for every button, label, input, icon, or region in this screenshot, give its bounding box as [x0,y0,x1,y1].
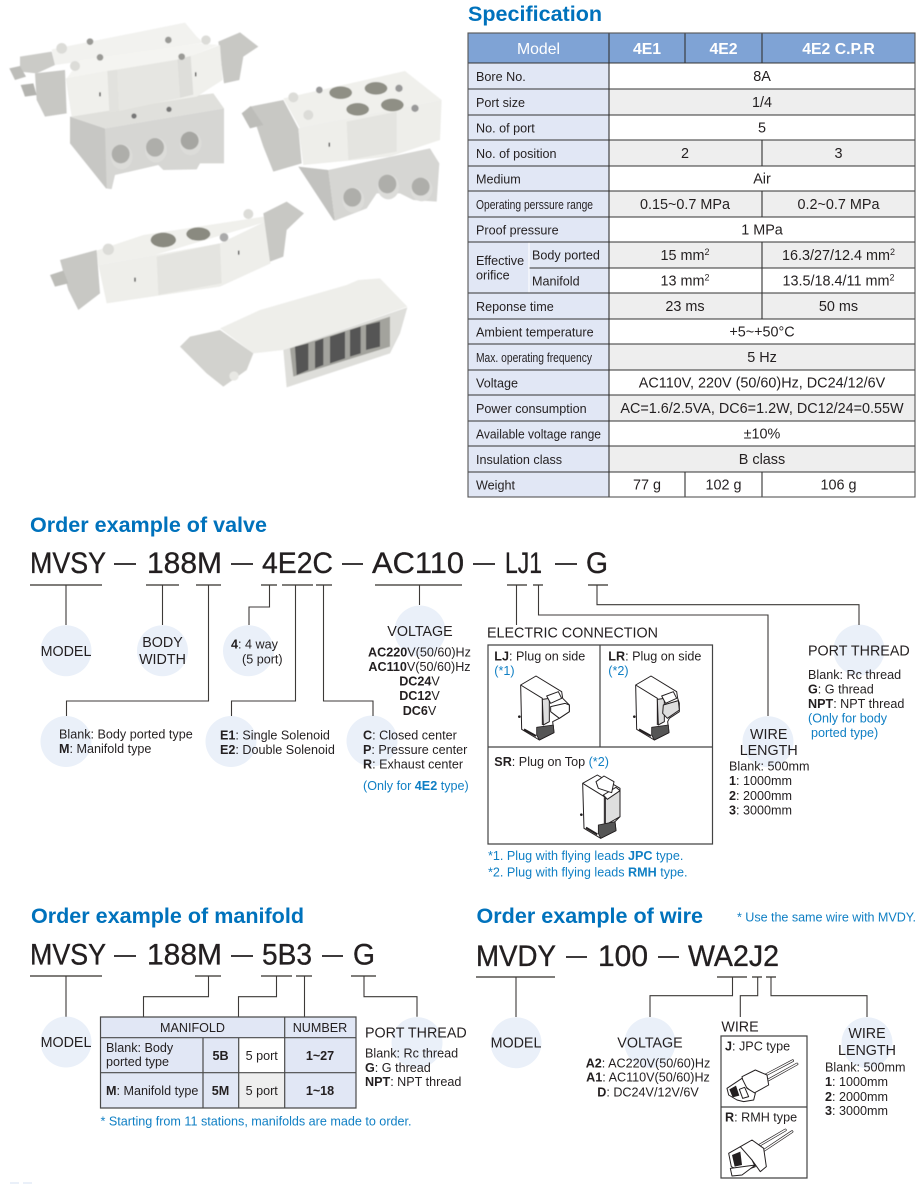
way and port note: 4: 4 way [231,638,278,652]
wire length options: 3: 3000mm [729,804,792,818]
wire order code [476,940,779,973]
wire length options: 1: 1000mm [825,1075,888,1089]
plug footnotes: *1. Plug with flying leads JPC type. [488,849,683,863]
voltage options: AC220V(50/60)Hz [368,646,471,660]
manifold order code [30,938,375,972]
table values: 2 [704,272,710,282]
way and port note: (5 port) [242,652,283,666]
callout circles [40,1016,442,1068]
wire length options: Blank: 500mm [729,760,810,774]
table values: 23 ms [665,299,705,315]
wire length options: 2: 2000mm [729,789,792,803]
valve with manifold, top left [9,23,258,189]
port thread options: PORT THREAD [808,644,910,660]
wire length options: 3: 3000mm [825,1104,888,1118]
table row labels: Proof pressure [476,224,559,238]
port thread options: NPT: NPT thread [365,1075,461,1089]
center options: (Only for 4E2 type) [363,779,469,793]
wire order code: WA2J2 [688,940,779,973]
table row labels: Available voltage range [476,428,601,442]
table row labels: Weight [476,478,515,492]
icon: LR side plug [633,676,679,740]
heading: order example of manifold: Order example of manifold [31,904,304,928]
mounting type options: Blank: Body ported type [59,728,193,742]
wire order code: 100 [598,940,648,973]
valve order code [30,547,608,580]
voltage options [368,624,471,718]
center options [363,729,469,793]
table values: 5 Hz [747,350,777,366]
manifold order code: G [353,938,375,972]
table values: 77 g [633,478,661,494]
wire type panel: J: JPC type [725,1040,790,1054]
connector lines [66,585,859,716]
table values: 8A [753,69,771,85]
plug footnotes [488,849,688,880]
model label: MODEL [41,1035,91,1051]
model label: MODEL [41,644,91,660]
manifold table: 5 port [246,1049,278,1063]
manifold table: 1~27 [306,1049,334,1063]
table row labels: Reponse time [476,300,554,314]
specification table backgrounds [468,33,915,497]
table values: 0.15~0.7 MPa [640,197,730,213]
wire order code: MVDY [476,940,556,973]
wire length options: LENGTH [740,743,798,759]
plug footnotes: *2. Plug with flying leads RMH type. [488,866,688,880]
table row labels: Effective [476,254,524,268]
panel: order example of valve [30,513,910,880]
callout circles [490,1017,892,1068]
valve order code: 4E2C [262,547,333,580]
table row labels [476,70,601,492]
callout circles [40,606,884,767]
panel: order example of manifold [30,904,467,1129]
electric connection panel: LR: Plug on side [608,650,701,664]
table values: Air [753,172,771,188]
table values: ±10% [744,426,781,442]
table row labels: No. of position [476,147,557,161]
table row labels: Port size [476,96,525,110]
port thread options [365,1026,467,1089]
manifold-mount valve, underside [180,278,407,387]
table row labels: Insulation class [476,453,562,467]
manifold order code: MVSY [30,938,106,972]
product photo: valves and manifolds [9,23,442,387]
connector lines [516,977,867,1017]
voltage options: A1: AC110V(50/60)Hz [586,1071,710,1085]
mounting type options: M: Manifold type [59,742,151,756]
table values: B class [739,452,785,468]
port thread options: PORT THREAD [365,1026,467,1042]
port thread options [808,644,910,740]
icon: RMH connector [729,1130,792,1176]
table values: 50 ms [819,299,858,315]
wire length options: 1: 1000mm [729,774,792,788]
table header row: 4E2 [709,41,738,58]
manifold table: 5 port [246,1084,278,1098]
wire length options [729,727,810,818]
code underlines [476,976,776,978]
wire length options: WIRE [750,727,787,743]
code underlines [30,975,376,977]
valve order code: MVSY [30,547,106,580]
table row labels: Voltage [476,376,518,390]
center options: C: Closed center [363,729,457,743]
manifold order code: 188M [147,938,222,972]
table values: 2 [889,272,894,282]
port thread options: NPT: NPT thread [808,697,904,711]
body width label: WIDTH [139,652,186,668]
manifold table [100,1017,356,1108]
table values: 3 [834,146,843,162]
electric connection panel: (*1) [494,664,515,678]
heading: specification: Specification [468,2,602,26]
table row labels: Max. operating frequency [476,351,593,365]
center options: R: Exhaust center [363,758,463,772]
table header row: 4E2 C.P.R [802,41,875,58]
panel: specification [468,2,915,497]
port thread options: G: G thread [808,683,874,697]
manifold table: M: Manifold type [106,1084,198,1098]
table values: 1/4 [752,95,772,111]
table row labels: Medium [476,172,521,186]
panel: order example of wire [476,904,916,1178]
icon: LJ side plug [518,676,569,740]
valve order code: G [586,547,608,580]
wire type panel [721,1020,807,1178]
table values: 102 g [705,478,742,494]
table values: 2 [681,146,689,162]
voltage options: D: DC24V/12V/6V [597,1086,699,1100]
table row labels: Body ported [532,248,600,262]
valve with manifold, top right [242,71,442,221]
valve order code: 188M [147,547,222,580]
table values [620,69,904,494]
table row labels: orifice [476,268,510,282]
manifold table: NUMBER [293,1021,347,1035]
electric connection panel: (*2) [608,664,629,678]
model label: MODEL [491,1036,541,1052]
electric connection panel: ELECTRIC CONNECTION [487,626,658,642]
table row labels: Manifold [532,274,580,288]
table row labels: Bore No. [476,70,526,84]
table row labels: Ambient temperature [476,326,594,340]
voltage options [586,1036,710,1100]
table values: 16.3/27/12.4 mm [782,248,890,264]
voltage options: DC6V [403,704,437,718]
table values: 15 mm [660,248,704,264]
table values: 13.5/18.4/11 mm [783,274,889,290]
solenoid options: E2: Double Solenoid [220,743,335,757]
center options: P: Pressure center [363,743,467,757]
voltage options: DC24V [399,675,440,689]
single valve, body ported [50,202,304,310]
code underlines [30,584,608,586]
manifold table: 5M [212,1084,229,1098]
manifold order code: 5B3 [262,938,312,972]
solenoid options: E1: Single Solenoid [220,729,330,743]
specification table grid [468,33,915,497]
manifold table: 1~18 [306,1084,334,1098]
port thread options: Blank: Rc thread [365,1047,458,1061]
manifold footnote: * Starting from 11 stations, manifolds are made to order. [100,1115,412,1129]
icon: JPC connector [727,1061,797,1102]
table values: 1 MPa [741,222,783,238]
table values: 106 g [820,478,857,494]
port thread options: Blank: Rc thread [808,668,901,682]
manifold table: ported type [106,1055,169,1069]
table values: 0.2~0.7 MPa [797,197,880,213]
heading: order example of wire: Order example of wire [476,904,703,928]
voltage options: A2: AC220V(50/60)Hz [586,1057,710,1071]
wire length options [825,1026,906,1118]
table header row [517,41,875,58]
wire length options: 2: 2000mm [825,1090,888,1104]
table row labels: Operating perssure range [476,198,593,212]
table values: 13 mm [660,274,704,290]
wire length options: Blank: 500mm [825,1061,906,1075]
icon: SR top plug [580,775,620,838]
wire compatibility note: * Use the same wire with MVDY. [737,911,916,925]
wire length options: WIRE [848,1026,886,1042]
table row labels: No. of port [476,122,535,136]
wire type panel: R: RMH type [725,1111,797,1125]
manifold table: MANIFOLD [160,1021,225,1035]
port thread options: (Only for body [808,712,888,726]
electric connection panel: LJ: Plug on side [494,650,585,664]
electric connection panel: SR: Plug on Top (*2) [494,755,609,769]
voltage options: DC12V [399,689,440,703]
connector lines [66,976,417,1017]
table values: 5 [758,120,766,136]
table values: AC110V, 220V (50/60)Hz, DC24/12/6V [639,376,886,392]
voltage options: VOLTAGE [387,624,453,640]
voltage options: AC110V(50/60)Hz [368,660,471,674]
wire length options: LENGTH [838,1043,896,1059]
port thread options: ported type) [811,726,878,740]
table values: AC=1.6/2.5VA, DC6=1.2W, DC12/24=0.55W [620,401,904,417]
heading: order example of valve: Order example of valve [30,513,267,537]
table row labels: Power consumption [476,402,587,416]
valve order code: AC110 [372,547,464,580]
table header row: 4E1 [633,41,661,58]
table header row: Model [517,41,560,58]
voltage options: VOLTAGE [617,1036,683,1052]
table values: 2 [890,247,895,257]
body width label: BODY [142,635,183,651]
manifold table: Blank: Body [106,1041,174,1055]
table values: +5~+50°C [729,324,795,340]
port thread options: G: G thread [365,1061,431,1075]
table values: 2 [704,247,710,257]
electric connection panel [487,626,712,844]
valve order code: LJ1 [505,547,542,580]
manifold table: 5B [212,1049,229,1063]
wire type panel: WIRE [721,1020,759,1036]
